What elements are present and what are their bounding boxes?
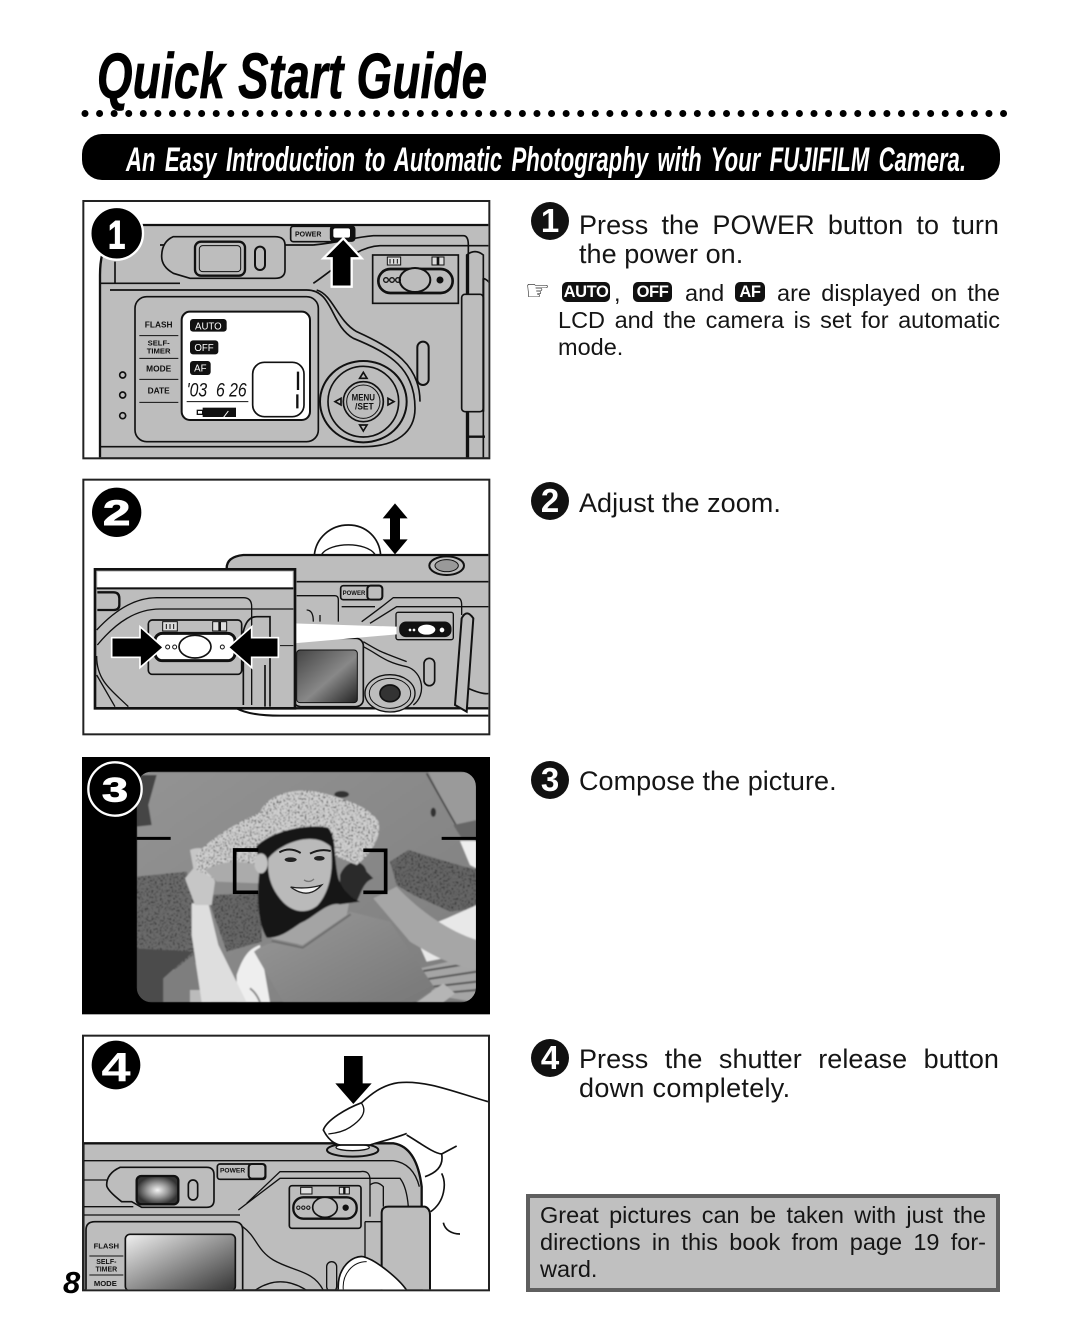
lcd labels: TIMER xyxy=(147,347,171,356)
down arrow xyxy=(335,1056,372,1104)
step 1 badge: 1 xyxy=(108,213,125,257)
grip xyxy=(455,613,473,712)
step 3 instruction: Compose the picture. xyxy=(579,766,837,796)
note line 1: are displayed on the xyxy=(777,280,1000,306)
step 4 number: 4 xyxy=(541,1039,559,1076)
neck xyxy=(272,902,349,945)
lens bump xyxy=(314,525,381,555)
right arm xyxy=(373,887,477,968)
screen xyxy=(293,638,363,707)
panel: step 4 shutter illustration: FLASH xyxy=(94,1242,120,1251)
power switch xyxy=(217,1164,266,1179)
panel: step 1 power button illustration: POWER xyxy=(295,232,321,239)
indicator dots xyxy=(120,372,126,378)
pill slot xyxy=(424,658,435,686)
panel: step 4 shutter illustration: TIMER xyxy=(95,1266,117,1273)
lcd surround xyxy=(135,297,318,442)
step 1 instruction line 2: the power on. xyxy=(579,239,743,269)
lcd labels: DATE xyxy=(148,386,170,396)
arrow xyxy=(323,238,362,287)
badge: AUTO: AUTO xyxy=(564,283,608,301)
torso xyxy=(254,912,435,1002)
step 4 instruction line 1: Press the shutter release button xyxy=(579,1044,999,1074)
step 1 badge xyxy=(90,207,143,260)
focus brackets xyxy=(137,838,477,892)
panel: step 1 power button illustration: /SET xyxy=(355,402,374,412)
right background xyxy=(413,905,477,962)
camera body xyxy=(227,555,490,708)
step 1 number xyxy=(531,202,569,240)
inset arrows xyxy=(112,627,163,668)
lcd screen xyxy=(182,312,310,420)
power switch xyxy=(341,586,382,600)
up-down arrow xyxy=(383,503,408,554)
inset zoom switch xyxy=(148,620,242,674)
viewfinder xyxy=(162,237,285,278)
camera body xyxy=(100,225,490,458)
step 2 number xyxy=(531,482,569,520)
inset xyxy=(95,569,295,708)
step 2 badge xyxy=(92,488,141,537)
grip xyxy=(365,1183,383,1290)
zoom switch small xyxy=(396,612,453,640)
comma: , xyxy=(614,280,621,306)
viewfinder xyxy=(107,1167,214,1207)
step 3 number: 3 xyxy=(541,761,559,798)
hand back xyxy=(407,1135,444,1212)
panel: step 1 power button illustration xyxy=(83,201,491,458)
photograph xyxy=(137,772,477,1002)
step 4 instruction line 2: down completely. xyxy=(579,1073,790,1103)
step 3 badge: 3 xyxy=(102,771,128,809)
finger xyxy=(323,1082,488,1145)
badge: AF xyxy=(735,282,765,302)
foliage xyxy=(136,871,196,970)
panel: step 4 shutter illustration: POWER xyxy=(220,1168,245,1175)
panel: step 1 power button illustration: MENU xyxy=(352,392,375,402)
badge: AF: AF xyxy=(739,283,761,301)
step 2 badge: 2 xyxy=(103,494,130,533)
lcd badges: OFF xyxy=(194,343,214,354)
callout line 3: ward. xyxy=(540,1256,597,1282)
step 2 instruction: Adjust the zoom. xyxy=(579,488,781,518)
flying hair xyxy=(340,862,373,902)
lcd xyxy=(86,1222,243,1290)
lcd badges: AF xyxy=(194,364,207,375)
lcd badges xyxy=(187,319,247,401)
lcd labels: MODE xyxy=(146,363,172,373)
panel: step 2 zoom illustration: POWER xyxy=(343,591,366,597)
hair xyxy=(256,826,360,938)
panel: step 4 shutter illustration: SELF- xyxy=(96,1259,117,1266)
callout line 1: Great pictures can be taken with just the xyxy=(540,1202,986,1228)
lcd labels: SELF- xyxy=(148,339,170,348)
step 1 number: 1 xyxy=(541,202,559,239)
oval xyxy=(417,342,429,385)
page number: 8 xyxy=(63,1265,81,1300)
step 4 badge: 4 xyxy=(101,1044,131,1090)
step 1 instruction line 1: Press the POWER button to turn xyxy=(579,210,999,240)
note line 3: mode. xyxy=(558,334,623,360)
badge: OFF: OFF xyxy=(637,283,668,301)
step 4 badge xyxy=(92,1041,140,1090)
step 3 number xyxy=(531,761,569,799)
zoom switch xyxy=(373,255,458,303)
shutter button xyxy=(327,1143,378,1157)
zoom guide wedge xyxy=(293,623,397,643)
step 2 number: 2 xyxy=(541,482,559,519)
lcd badges: AUTO xyxy=(195,321,222,332)
lcd labels: FLASH xyxy=(145,320,173,330)
word: and: and xyxy=(685,280,724,306)
callout xyxy=(526,1194,1000,1292)
zoom switch xyxy=(289,1186,361,1228)
raised arm xyxy=(192,903,247,1002)
callout line 2: directions in this book from page 19 for- xyxy=(540,1229,986,1255)
step 3 badge xyxy=(88,762,142,816)
straw hat xyxy=(196,791,379,878)
dial xyxy=(365,675,415,712)
dial xyxy=(320,361,407,442)
panel: step 4 shutter illustration xyxy=(83,1036,489,1292)
body curves xyxy=(243,1227,323,1290)
lcd labels xyxy=(145,320,173,396)
panel: step 2 zoom illustration xyxy=(83,480,490,734)
grip xyxy=(462,294,483,412)
panel: step 4 shutter illustration: MODE xyxy=(94,1279,117,1288)
panel: step 3 viewfinder photo xyxy=(82,757,490,1014)
camera body xyxy=(83,1143,422,1290)
lcd badges: '03 6 26 xyxy=(187,380,247,401)
step 4 number xyxy=(531,1039,569,1077)
note icon: pointing hand: ☞ xyxy=(525,274,550,307)
face xyxy=(268,839,332,911)
lower thumb xyxy=(338,1257,407,1290)
title: Quick Start Guide xyxy=(97,40,487,112)
note line 2: LCD and the camera is set for automatic xyxy=(558,306,1000,332)
power switch xyxy=(291,226,341,242)
